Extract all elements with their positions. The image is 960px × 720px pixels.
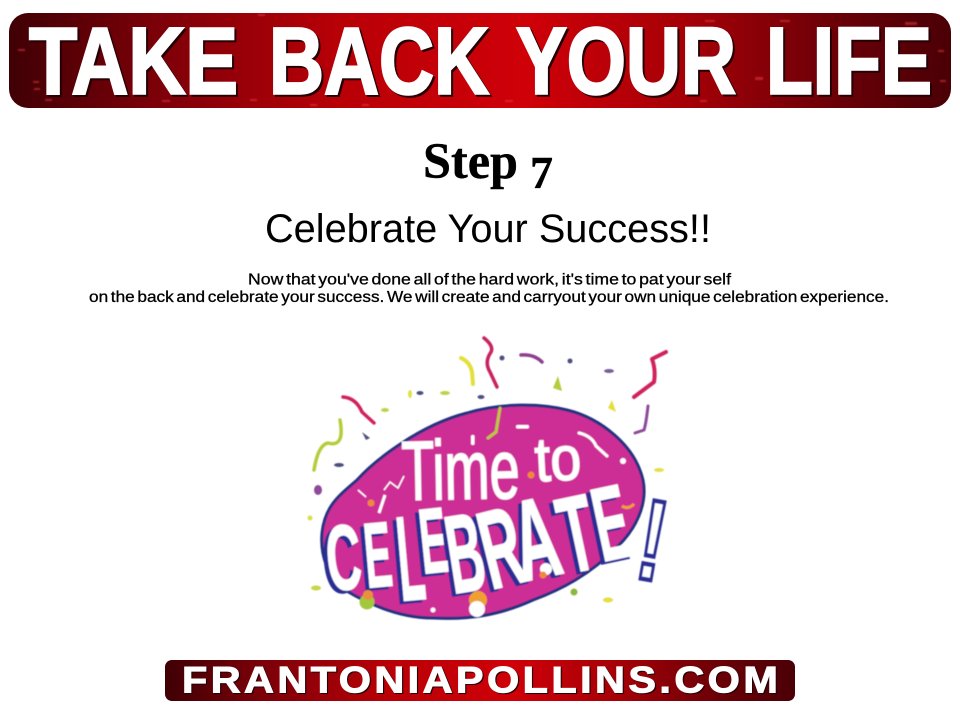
ellipse details <box>358 408 626 513</box>
bottom dots <box>360 504 634 617</box>
celebrate lettering: E <box>414 489 452 595</box>
celebrate lettering: R <box>467 482 536 613</box>
celebrate lettering: E <box>582 462 640 584</box>
illustration: time to celebrate <box>308 338 677 628</box>
celebrate lettering: L <box>392 491 430 628</box>
time to lettering: to <box>533 424 583 495</box>
celebrate lettering: A <box>501 472 571 606</box>
footer banner: website <box>165 660 795 701</box>
magenta ellipse <box>322 405 644 618</box>
celebrate lettering: E <box>360 503 396 609</box>
subheading: celebrate your success: Celebrate Your Success!! <box>265 207 711 251</box>
heading: step 7 <box>423 134 553 198</box>
banner: take back your life <box>9 8 951 114</box>
banner title text <box>29 8 932 114</box>
body text: Now that you've done all of the hard work, it's time to pat your self <box>248 272 732 288</box>
confetti dots <box>308 356 664 602</box>
celebrate lettering <box>322 462 640 628</box>
celebrate lettering: C <box>322 504 366 611</box>
body text: on the back and celebrate your success. We will create and carryout your own unique celebration experience. <box>89 289 889 306</box>
celebrate lettering: T <box>548 472 606 597</box>
exclamation mark: ! <box>629 474 677 606</box>
heading: step 7: Step <box>423 134 518 190</box>
heading: step 7: 7 <box>530 147 553 198</box>
website text: FRANTONIAPOLLINS.COM <box>182 660 778 701</box>
time to lettering: Time <box>401 422 520 518</box>
banner title text: TAKE <box>29 8 238 114</box>
celebrate lettering: B <box>437 490 493 618</box>
body text <box>89 272 889 306</box>
banner title text: YOUR <box>516 8 736 114</box>
confetti <box>314 338 666 470</box>
banner title text: BACK <box>269 8 489 114</box>
